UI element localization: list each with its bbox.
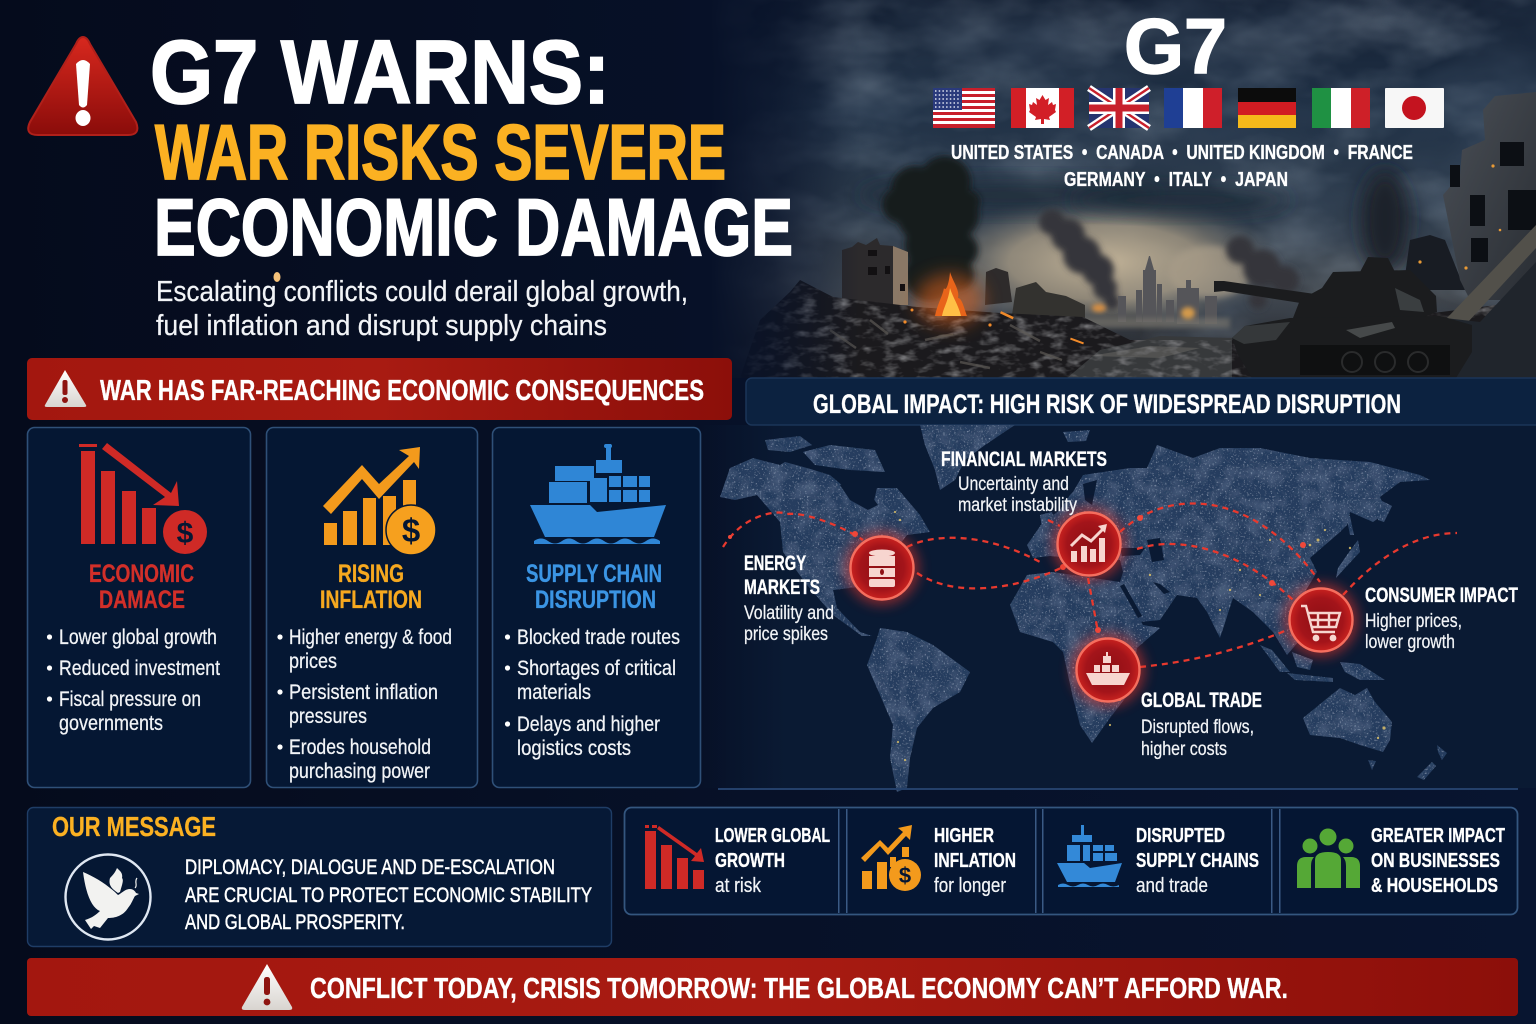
label: global trade: [1141, 689, 1262, 760]
label: consumer impact: lower growth: [1365, 632, 1455, 653]
label: financial markets: market instability: [958, 495, 1077, 516]
panel: global impact heading: [746, 378, 1536, 425]
item: higher inflation: HIGHER: [934, 825, 994, 847]
label: energy markets: MARKETS: [744, 576, 820, 599]
bullet list: Persistent inflation: [289, 681, 438, 704]
label: consumer impact: [1365, 584, 1518, 653]
icon: oil barrel: [869, 550, 895, 587]
item: businesses and households: [1297, 825, 1505, 897]
item: disrupted supply chains: SUPPLY CHAINS: [1136, 850, 1259, 872]
flag: France: [1164, 88, 1222, 128]
item: lower growth: at risk: [715, 875, 762, 897]
icon: container ship: [530, 444, 666, 544]
bullet list: logistics costs: [517, 737, 631, 760]
bullet list: Reduced investment: [59, 657, 220, 680]
bullet list: Erodes household: [289, 736, 431, 759]
item: higher inflation: for longer: [934, 875, 1006, 897]
title: [150, 23, 793, 273]
continents: [720, 425, 1447, 792]
item: higher inflation: $: [899, 863, 911, 888]
icon: white warning triangle: [242, 964, 292, 1010]
title: ECONOMIC DAMAGE: [154, 183, 793, 273]
warning triangle icon: [28, 37, 137, 135]
title: G7 WARNS:: [150, 23, 610, 123]
heading: [89, 560, 194, 614]
icon: shopping cart: [1301, 606, 1340, 632]
flag: United Kingdom: [1089, 88, 1149, 128]
left fade: [690, 0, 860, 378]
G7 heading: G7: [1124, 2, 1227, 90]
label: energy markets: Volatility and: [744, 603, 834, 624]
label: energy markets: price spikes: [744, 624, 828, 645]
heading: [526, 560, 662, 614]
icon: falling bars and dollar: $: [177, 517, 194, 550]
label: energy markets: ENERGY: [744, 552, 806, 575]
heading: OUR MESSAGE: [52, 811, 216, 842]
map ocean backdrop: [702, 425, 1536, 788]
item: disrupted supply chains: and trade: [1136, 875, 1208, 897]
flag: Germany: [1238, 88, 1296, 128]
tank: [1214, 257, 1472, 378]
hero: war-torn city scene: [690, 0, 1536, 378]
node: consumer impact: [1284, 583, 1358, 657]
icon: group of people: [1297, 828, 1360, 888]
bullet list: [505, 626, 680, 760]
label: financial markets: [941, 448, 1107, 516]
member country names: GERMANY • ITALY • JAPAN: [1064, 169, 1288, 191]
item: disrupted supply chains: [1057, 825, 1259, 897]
icon: rising chart: [1071, 524, 1107, 562]
label: financial markets: Uncertainty and: [958, 474, 1069, 495]
inland seas: [840, 480, 1170, 618]
message text: DIPLOMACY, DIALOGUE AND DE-ESCALATION: [185, 856, 555, 879]
ruined building left: [842, 238, 1085, 322]
message text: AND GLOBAL PROSPERITY.: [185, 911, 405, 934]
bullet list: governments: [59, 712, 163, 735]
bullet list: Blocked trade routes: [517, 626, 680, 649]
bullet list: Lower global growth: [59, 626, 217, 649]
heading: ECONOMIC: [89, 560, 194, 588]
fire: [903, 272, 1195, 344]
panel: our message: [28, 808, 612, 946]
bullet list: [47, 626, 220, 735]
flag: Japan: [1385, 88, 1444, 128]
distant skyline: [1118, 256, 1217, 324]
subtitle: Escalating conflicts could derail global growth,: [156, 276, 688, 308]
dashed risk routes: [723, 503, 1457, 667]
bullet list: [277, 626, 452, 783]
bullet list: prices: [289, 650, 337, 673]
title: WAR RISKS SEVERE: [155, 108, 726, 196]
subtitle: [156, 272, 688, 342]
sunlit horizon: [970, 205, 1256, 320]
label: global trade: Disrupted flows,: [1141, 717, 1254, 738]
panel: economic damage: [28, 428, 250, 788]
member country names: UNITED STATES • CANADA • UNITED KINGDOM • FRANCE: [951, 142, 1413, 164]
message text: [185, 856, 592, 934]
bullet list: Fiscal pressure on: [59, 688, 201, 711]
label: global trade: GLOBAL TRADE: [1141, 689, 1262, 712]
icon: rising bars and dollar: $: [402, 512, 420, 549]
item: lower growth: [645, 825, 830, 897]
icon: falling bars: [645, 825, 704, 889]
panel: supply chain disruption: [492, 428, 700, 788]
banner: closing statement: [27, 958, 1518, 1016]
world map: [720, 425, 1447, 792]
banner: consequences: [27, 358, 732, 420]
bullet list: Delays and higher: [517, 713, 660, 736]
item: businesses and households: ON BUSINESSES: [1371, 850, 1500, 872]
item: lower growth: LOWER GLOBAL: [715, 825, 830, 847]
heading: SUPPLY CHAIN: [526, 560, 662, 588]
panel: rising inflation: [266, 428, 478, 788]
icon: ship: [1086, 652, 1130, 685]
bullet list: pressures: [289, 705, 367, 728]
city lights: [894, 511, 1386, 761]
bullet list: Shortages of critical: [517, 657, 676, 680]
label: consumer impact: Higher prices,: [1365, 611, 1462, 632]
icon: rising bars and dollar: [323, 447, 436, 555]
panel: impact summary strip: [624, 808, 1518, 914]
node: global trade: [1071, 633, 1145, 707]
flags row: [933, 88, 1444, 128]
member country names: [951, 142, 1413, 191]
flag: Italy: [1312, 88, 1370, 128]
smoke plumes: [882, 156, 980, 301]
label: global trade: higher costs: [1141, 739, 1227, 760]
node: financial markets: [1052, 507, 1126, 581]
banner: consequences: WAR HAS FAR-REACHING ECONOMIC CONSEQUENCES: [100, 375, 704, 407]
heading: RISING: [338, 560, 404, 588]
flag: Canada: [1011, 88, 1074, 128]
heading: DAMACE: [99, 586, 185, 614]
icon: white warning triangle: [45, 370, 86, 407]
item: disrupted supply chains: DISRUPTED: [1136, 825, 1225, 847]
heading: DISRUPTION: [535, 586, 656, 614]
message text: ARE CRUCIAL TO PROTECT ECONOMIC STABILITY: [185, 884, 592, 907]
icon: container ship: [1057, 825, 1122, 887]
bullet list: Higher energy & food: [289, 626, 452, 649]
node: energy markets: [845, 531, 919, 605]
flag: United States: [933, 88, 995, 128]
bullet list: purchasing power: [289, 760, 430, 783]
item: lower growth: GROWTH: [715, 850, 785, 872]
item: businesses and households: & HOUSEHOLDS: [1371, 875, 1498, 897]
subtitle: fuel inflation and disrupt supply chains: [156, 310, 607, 342]
rubble foreground: [740, 280, 1536, 378]
heading: [320, 560, 422, 614]
ruined building right: [1403, 92, 1536, 378]
item: higher inflation: INFLATION: [934, 850, 1016, 872]
heading: INFLATION: [320, 586, 422, 614]
icon: peace dove: [66, 854, 150, 940]
icon: rising bars and coin: [861, 825, 921, 891]
item: higher inflation: [861, 825, 1016, 897]
label: energy markets: [744, 552, 834, 645]
label: financial markets: FINANCIAL MARKETS: [941, 448, 1107, 471]
banner: closing statement: CONFLICT TODAY, CRISIS TOMORROW: THE GLOBAL ECONOMY CAN’T AFFORD WAR.: [310, 973, 1288, 1005]
bullet list: materials: [517, 681, 591, 704]
icon: falling bars and dollar: [79, 443, 207, 554]
